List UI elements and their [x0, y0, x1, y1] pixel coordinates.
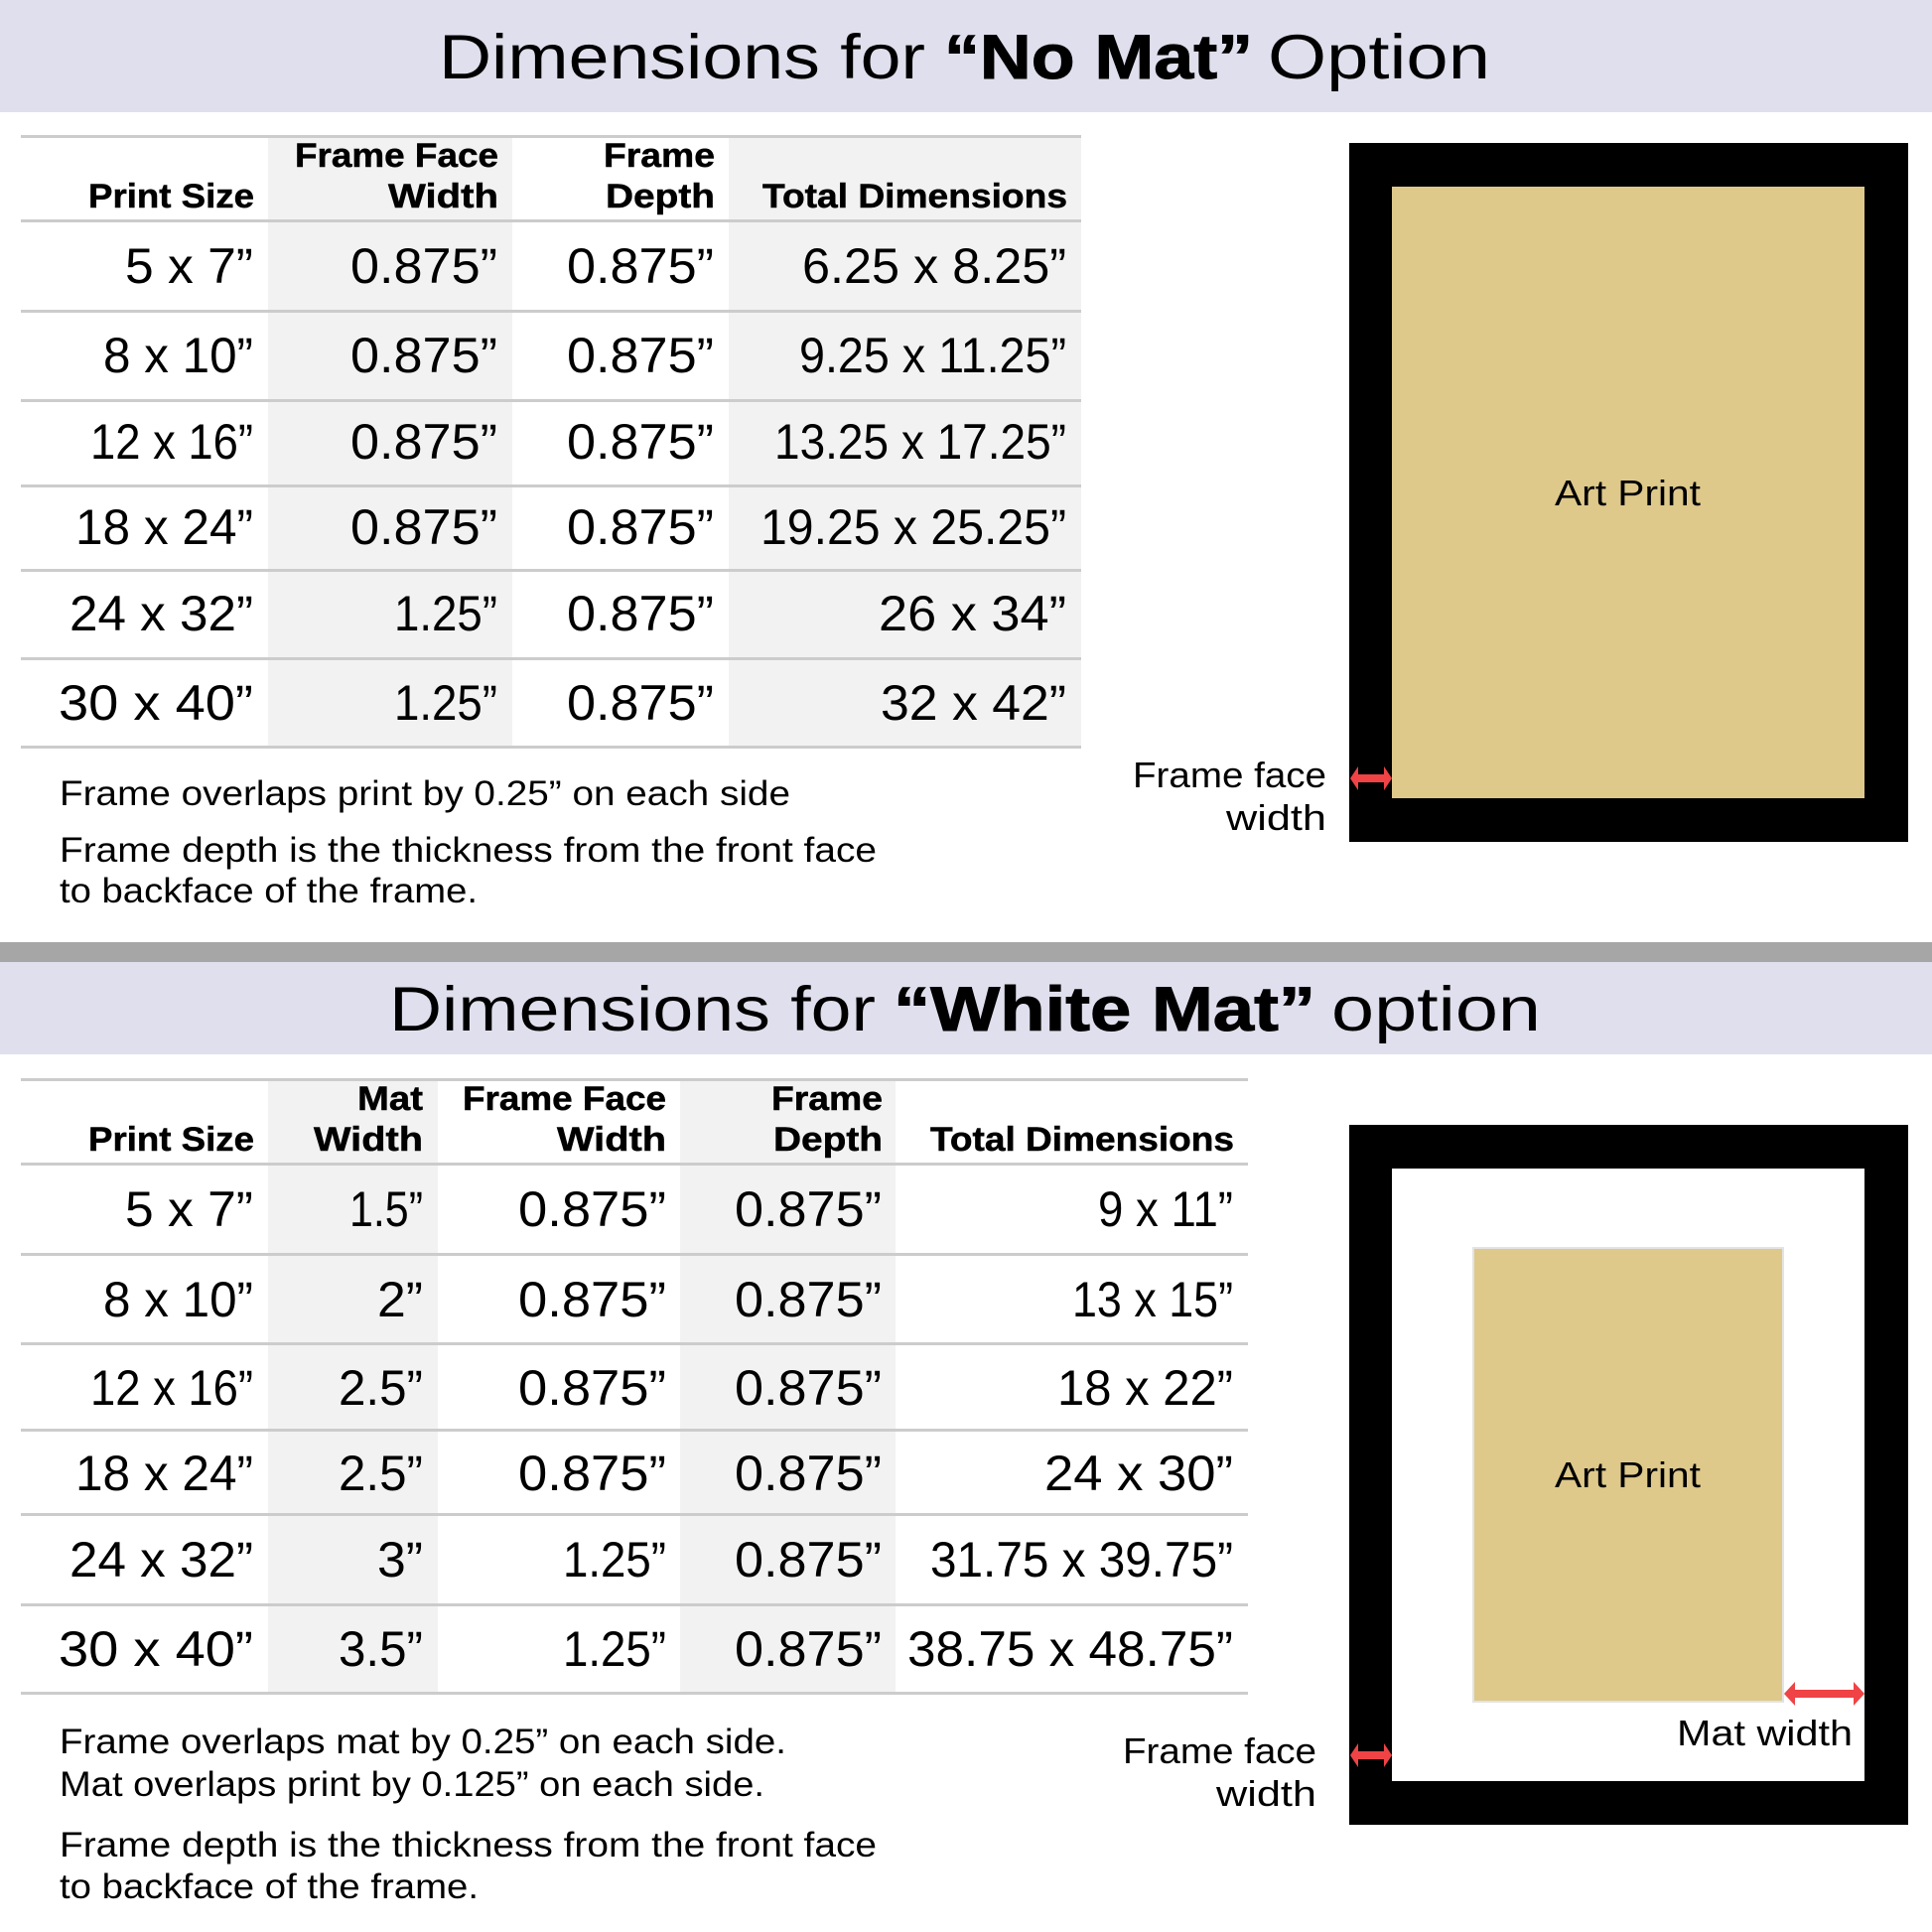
row 5 x 7: 5 x 7” [125, 238, 253, 294]
row 5 x 7: 0.875” [567, 238, 714, 294]
diagram: no mat frame [1133, 143, 1908, 842]
table header row: Width [557, 1121, 666, 1159]
row 8 x 10: 9.25 x 11.25” [799, 328, 1066, 383]
row 24 x 32: 0.875” [735, 1532, 882, 1587]
title band: white mat: option [1331, 975, 1541, 1044]
label: frame face width: Frame face [1133, 755, 1326, 795]
row 18 x 24: 18 x 24” [75, 499, 253, 555]
table: no mat dimensions [21, 135, 1081, 749]
table header row: Mat [357, 1080, 423, 1118]
divider band [0, 942, 1932, 962]
row 18 x 24: 0.875” [350, 499, 497, 555]
row 12 x 16: 0.875” [567, 414, 714, 470]
row 18 x 24: 24 x 30” [1044, 1446, 1233, 1501]
label: frame face width: width [1215, 1773, 1316, 1814]
row 24 x 32: 24 x 32” [69, 1532, 253, 1587]
notes: white mat: Mat overlaps print by 0.125” on each side. [60, 1765, 764, 1804]
arrow: frame face width [1350, 766, 1392, 790]
row 8 x 10: 2” [377, 1272, 423, 1327]
table header row: Width [314, 1121, 423, 1159]
notes: no mat: Frame overlaps print by 0.25” on each side [60, 774, 790, 813]
row 8 x 10: 0.875” [518, 1272, 666, 1327]
notes: no mat: Frame depth is the thickness from the front face [60, 831, 877, 870]
notes: white mat: Frame overlaps mat by 0.25” on each side. [60, 1723, 786, 1761]
notes: white mat [60, 1723, 877, 1906]
notes: white mat: Frame depth is the thickness from the front face [60, 1826, 877, 1864]
row 30 x 40 [59, 675, 1066, 731]
arrow: mat width [1784, 1682, 1864, 1706]
row 12 x 16: 18 x 22” [1057, 1360, 1233, 1416]
row 24 x 32 [69, 1532, 1233, 1587]
row 18 x 24 [75, 499, 1066, 555]
row 12 x 16 [90, 414, 1066, 470]
row 30 x 40: 3.5” [339, 1621, 423, 1677]
title band: white mat: “White Mat” [894, 975, 1315, 1044]
row 30 x 40 [59, 1621, 1233, 1677]
notes: no mat: to backface of the frame. [60, 872, 478, 910]
row 24 x 32 [69, 586, 1066, 641]
row 18 x 24 [75, 1446, 1233, 1501]
row 5 x 7: 9 x 11” [1098, 1181, 1233, 1237]
row 12 x 16: 12 x 16” [90, 1360, 253, 1416]
label: mat width: Mat width [1677, 1713, 1853, 1753]
row 24 x 32: 0.875” [567, 586, 714, 641]
row 30 x 40: 1.25” [563, 1621, 666, 1677]
table header row: Frame Face [295, 137, 498, 175]
table header row: Depth [606, 178, 715, 215]
table header row: Print Size [88, 178, 254, 215]
row 18 x 24: 0.875” [518, 1446, 666, 1501]
row 24 x 32: 3” [377, 1532, 423, 1587]
title band: no mat: Dimensions for [439, 23, 925, 92]
row 12 x 16: 13.25 x 17.25” [774, 414, 1066, 470]
row 8 x 10: 0.875” [350, 328, 497, 383]
row 8 x 10: 13 x 15” [1072, 1272, 1233, 1327]
row 12 x 16: 0.875” [350, 414, 497, 470]
table header row: Depth [773, 1121, 883, 1159]
row 30 x 40: 32 x 42” [881, 675, 1066, 731]
row 12 x 16: 2.5” [339, 1360, 423, 1416]
title band: white mat: Dimensions for [389, 975, 876, 1044]
row 18 x 24: 19.25 x 25.25” [760, 499, 1066, 555]
table header row: Frame [604, 137, 715, 175]
row 12 x 16: 12 x 16” [90, 414, 253, 470]
row 18 x 24: 18 x 24” [75, 1446, 253, 1501]
row 5 x 7: 1.5” [349, 1181, 423, 1237]
row 12 x 16 [90, 1360, 1233, 1416]
row 5 x 7: 0.875” [735, 1181, 882, 1237]
row 30 x 40: 30 x 40” [59, 675, 253, 731]
table header row: Total Dimensions [930, 1121, 1234, 1159]
row 18 x 24: 0.875” [735, 1446, 882, 1501]
table header row [88, 1080, 1234, 1159]
table header row: Frame Face [463, 1080, 666, 1118]
row 30 x 40: 30 x 40” [59, 1621, 253, 1677]
row 5 x 7 [125, 238, 1066, 294]
row 5 x 7: 5 x 7” [125, 1181, 253, 1237]
row 8 x 10: 8 x 10” [103, 328, 253, 383]
row 24 x 32: 31.75 x 39.75” [930, 1532, 1233, 1587]
row 8 x 10 [103, 328, 1066, 383]
table header row: Print Size [88, 1121, 254, 1159]
row 24 x 32: 1.25” [563, 1532, 666, 1587]
notes: white mat: to backface of the frame. [60, 1867, 479, 1906]
table: white mat dimensions [21, 1078, 1248, 1695]
title band: no mat: Option [1268, 23, 1490, 92]
label: art print: Art Print [1555, 1454, 1701, 1495]
arrow: frame face width [1350, 1743, 1392, 1767]
table header row [88, 137, 1067, 215]
row 8 x 10: 0.875” [735, 1272, 882, 1327]
label: frame face width: Frame face [1123, 1730, 1316, 1771]
table header row: Total Dimensions [762, 178, 1067, 215]
title band: white mat [0, 962, 1932, 1054]
row 18 x 24: 2.5” [339, 1446, 423, 1501]
label: frame face width [1123, 1730, 1316, 1814]
row 5 x 7: 0.875” [518, 1181, 666, 1237]
row 30 x 40: 0.875” [567, 675, 714, 731]
title band: no mat [0, 0, 1932, 112]
row 24 x 32: 26 x 34” [879, 586, 1066, 641]
row 12 x 16: 0.875” [735, 1360, 882, 1416]
row 5 x 7: 6.25 x 8.25” [802, 238, 1066, 294]
panel: no mat section [0, 0, 1932, 910]
panel: white mat section [0, 962, 1932, 1906]
notes: no mat [60, 774, 877, 910]
row 30 x 40: 38.75 x 48.75” [907, 1621, 1233, 1677]
row 8 x 10: 8 x 10” [103, 1272, 253, 1327]
label: frame face width: width [1225, 797, 1326, 838]
table header row: Frame [771, 1080, 883, 1118]
row 18 x 24: 0.875” [567, 499, 714, 555]
table header row: Width [388, 178, 498, 215]
label: frame face width [1133, 755, 1326, 838]
row 24 x 32: 1.25” [394, 586, 497, 641]
row 24 x 32: 24 x 32” [69, 586, 253, 641]
label: art print: Art Print [1555, 473, 1701, 513]
row 5 x 7: 0.875” [350, 238, 497, 294]
row 8 x 10 [103, 1272, 1233, 1327]
row 12 x 16: 0.875” [518, 1360, 666, 1416]
row 5 x 7 [125, 1181, 1233, 1237]
diagram: white mat frame [1123, 1125, 1908, 1825]
row 30 x 40: 1.25” [394, 675, 497, 731]
title band: no mat: “No Mat” [944, 23, 1253, 92]
row 8 x 10: 0.875” [567, 328, 714, 383]
row 30 x 40: 0.875” [735, 1621, 882, 1677]
